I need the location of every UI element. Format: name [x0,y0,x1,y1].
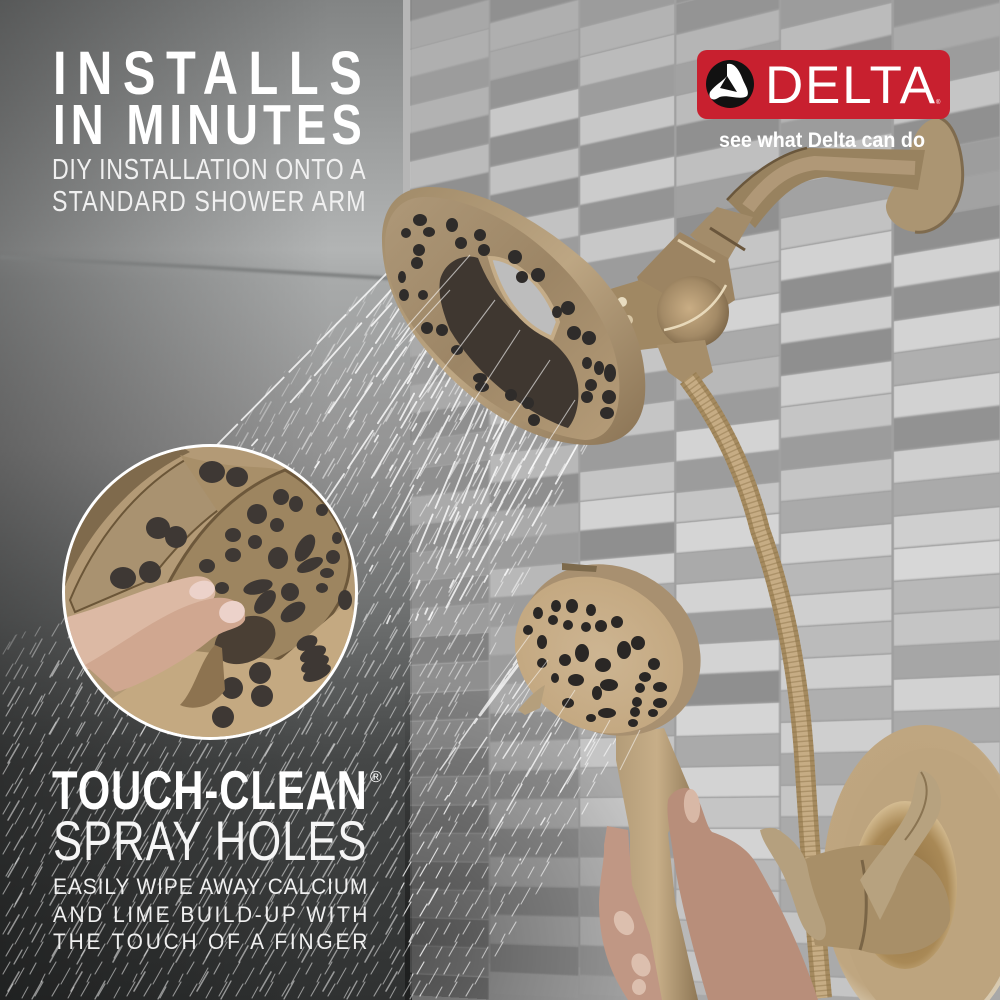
spray from the rain head [0,260,590,1000]
flexible hose [688,378,822,998]
opening through the head [439,256,578,428]
body copy: EASILY WIPE AWAY CALCIUM [53,873,367,899]
outer ring [65,449,190,586]
shower arm and flange [690,118,963,265]
finger-touch holes [110,461,352,728]
logo mark [706,60,754,108]
spray holes [398,214,616,426]
inner spray disc [165,470,350,670]
selector lever [180,645,225,708]
subhead: diy installation: STANDARD SHOWER ARM [52,184,366,218]
logo: delta [697,50,950,119]
spray from the hand shower [400,640,625,1000]
back shell [487,530,733,770]
headline: touch-clean: ® [370,769,382,786]
headline: touch-clean: TOUCH-CLEAN [52,761,367,821]
body copy: THE TOUCH OF A FINGER [53,928,367,954]
fingers [599,826,662,1000]
body copy [53,873,367,954]
valve body [798,845,950,955]
lower section [112,605,354,737]
two fingers wiping [67,576,216,669]
headline: spray holes: SPRAY HOLES [53,810,367,872]
subhead: diy installation [52,152,366,218]
swivel mount [607,232,735,388]
wall seen through the head [490,258,558,338]
rain shower head [382,187,645,470]
headline: installs in minutes: INSTALLS [53,39,362,107]
hand holding the shower [599,788,818,1000]
subhead: diy installation: DIY INSTALLATION ONTO A [52,152,366,186]
thumbnail [683,788,701,824]
logo: delta: ® [936,99,941,106]
handheld shower [485,530,733,1000]
logo: delta: DELTA [765,56,936,115]
lower tile shading [405,640,685,1000]
spray face [485,545,713,765]
inset circle: touch-clean close-up [55,440,360,750]
thumb and palm [667,788,818,1000]
tiled wall [410,0,1000,986]
tagline: see what Delta can do [719,129,925,152]
wall valve trim [760,725,1000,1000]
handle [616,728,698,1000]
headline: installs in minutes: IN MINUTES [53,92,362,156]
streaks over face [490,635,640,770]
water streaks over the head [395,255,575,470]
body copy: AND LIME BUILD-UP WITH [53,901,367,927]
valve levers [760,828,826,940]
headline: installs in minutes [53,39,362,156]
valve center [853,801,957,969]
spray lever [518,685,545,715]
holes [523,599,667,727]
